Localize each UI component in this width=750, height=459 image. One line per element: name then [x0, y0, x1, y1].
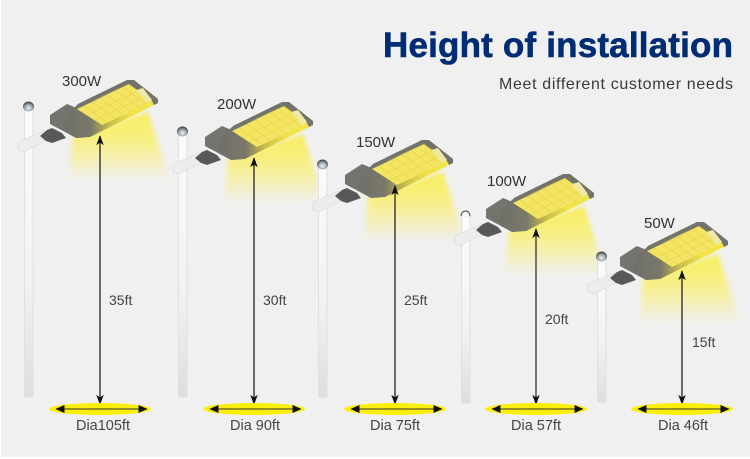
- lamp: 200W: [173, 102, 325, 203]
- light circle: Dia 46ft: [631, 403, 733, 415]
- diameter label: Dia 46ft: Dia 46ft: [658, 418, 708, 434]
- height arrow: 25ft: [394, 186, 396, 404]
- pole: 100W: [461, 211, 470, 403]
- lamp: 150W: [313, 140, 465, 241]
- height arrow: 20ft: [535, 229, 537, 404]
- title: Height of installation: [383, 26, 733, 65]
- wattage label: 50W: 50W: [644, 215, 676, 232]
- pole: 50W: [596, 252, 607, 402]
- light circle: Dia 57ft: [485, 403, 587, 415]
- height label: 20ft: 20ft: [545, 311, 568, 327]
- pole: 200W: [177, 126, 188, 397]
- lamp: 100W: [454, 174, 606, 275]
- 300W column: [18, 73, 170, 434]
- wattage label: 200W: 200W: [217, 96, 257, 113]
- height label: 25ft: 25ft: [404, 292, 427, 308]
- height label: 30ft: 30ft: [263, 292, 286, 308]
- wattage label: 300W: 300W: [62, 73, 102, 90]
- subtitle: Meet different customer needs: [499, 76, 733, 93]
- pole: 300W: [23, 102, 34, 397]
- height label: 15ft: 15ft: [692, 334, 715, 350]
- 150W column: [313, 134, 465, 434]
- diameter label: Dia 90ft: Dia 90ft: [230, 418, 280, 434]
- height arrow: 35ft: [99, 136, 101, 404]
- diameter label: Dia 57ft: Dia 57ft: [511, 418, 561, 434]
- height label: 35ft: 35ft: [109, 292, 132, 308]
- 200W column: [173, 96, 325, 434]
- height arrow: 30ft: [253, 158, 255, 404]
- light circle: Dia 75ft: [344, 403, 446, 415]
- pole: 150W: [317, 160, 328, 397]
- wattage label: 150W: 150W: [356, 134, 396, 151]
- 50W column: [588, 215, 740, 434]
- wattage label: 100W: 100W: [487, 173, 527, 190]
- diameter label: Dia 75ft: Dia 75ft: [370, 418, 420, 434]
- diameter label: Dia105ft: Dia105ft: [76, 418, 130, 434]
- light circle: Dia 90ft: [203, 403, 305, 415]
- lamp: 50W: [588, 222, 740, 323]
- height arrow: 15ft: [681, 271, 683, 404]
- lamp: 300W: [18, 80, 170, 181]
- 100W column: [454, 173, 606, 434]
- light circle: Dia105ft: [49, 403, 151, 415]
